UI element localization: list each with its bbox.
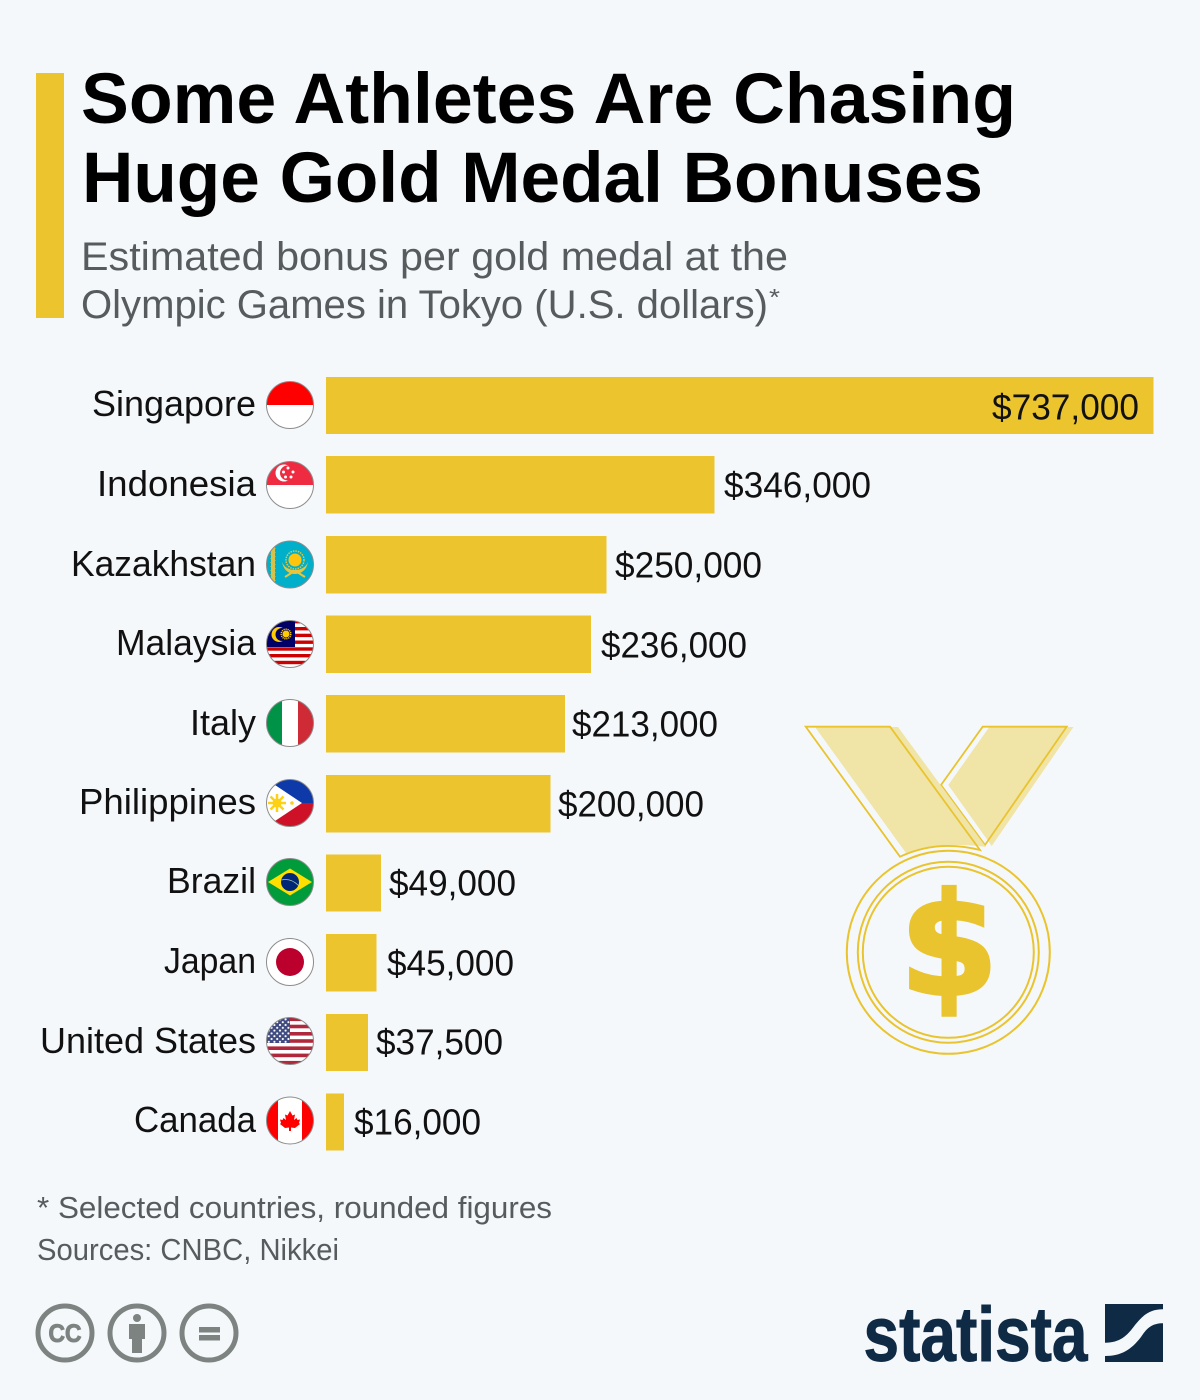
row: Brazil	[167, 854, 516, 912]
row: United States: $37,500	[376, 1022, 503, 1062]
icon: creative commons	[38, 1306, 92, 1360]
flag: red white maple leaf	[266, 1097, 314, 1145]
row: Malaysia	[116, 616, 747, 673]
flag: blue red white triangle	[266, 779, 314, 827]
subtitle: Olympic Games in Tokyo (U.S. dollars)	[81, 283, 768, 327]
subtitle: Estimated bonus per gold medal at the	[81, 235, 788, 279]
footnote: * Selected countries, rounded figures	[37, 1190, 552, 1225]
row: Kazakhstan: Kazakhstan	[71, 543, 256, 584]
row: Japan: Japan	[164, 940, 256, 981]
icon: gold medal with dollar sign	[806, 727, 1074, 1054]
title accent bar	[36, 73, 64, 318]
row: Canada	[134, 1094, 481, 1150]
flag: red over white	[266, 381, 314, 429]
row: Indonesia: Indonesia	[97, 463, 257, 504]
row: Philippines: Philippines	[79, 781, 256, 822]
icon: creative commons: CC	[48, 1320, 82, 1348]
row: Canada: $16,000	[354, 1102, 481, 1142]
medal ribbon	[806, 727, 1074, 857]
row: Japan	[164, 934, 514, 992]
row: Italy: Italy	[190, 702, 256, 743]
footnote	[37, 1190, 552, 1267]
row: Indonesia: $346,000	[724, 464, 871, 506]
medal rings	[847, 851, 1050, 1054]
row: Malaysia: $236,000	[601, 624, 747, 666]
flag: green diamond globe	[266, 858, 314, 906]
logo mark	[1105, 1304, 1163, 1362]
icon: attribution	[110, 1306, 164, 1360]
row: Philippines	[79, 775, 704, 832]
flag: stars and stripes	[266, 1017, 314, 1065]
wordmark: statista	[864, 1292, 1088, 1378]
row: United States	[40, 1014, 503, 1071]
flag: red and white with crescent	[266, 461, 314, 509]
title	[81, 60, 1016, 218]
row: Brazil: Brazil	[167, 860, 256, 901]
row: Malaysia: Malaysia	[116, 622, 257, 663]
subtitle	[81, 235, 788, 327]
row: Singapore	[92, 377, 1154, 434]
footnote: Sources: CNBC, Nikkei	[37, 1232, 339, 1267]
licence icons	[38, 1306, 236, 1360]
row: Italy	[190, 695, 718, 752]
title: Some Athletes Are Chasing	[81, 60, 1016, 139]
flag: turquoise with sun and ornament	[266, 541, 314, 589]
row: Italy: $213,000	[572, 704, 718, 744]
bar chart	[40, 377, 1154, 1150]
subtitle: *	[769, 284, 780, 310]
title: Huge Gold Medal Bonuses	[82, 139, 983, 218]
row: Indonesia	[97, 456, 871, 514]
flag: green white red	[266, 699, 314, 747]
row: Brazil: $49,000	[389, 862, 516, 904]
flag: stripes with canton	[266, 620, 314, 668]
flag: white with red disc	[266, 938, 314, 986]
row: Kazakhstan	[71, 536, 762, 594]
row: Kazakhstan: $250,000	[615, 544, 762, 586]
row: Japan: $45,000	[387, 942, 514, 984]
row: Singapore: $737,000	[992, 386, 1139, 428]
row: United States: United States	[40, 1020, 256, 1061]
row: Canada: Canada	[134, 1099, 257, 1140]
dollar sign: $	[900, 864, 998, 1028]
row: Philippines: $200,000	[558, 784, 704, 824]
icon: no derivatives	[182, 1306, 236, 1360]
statista logo	[864, 1292, 1163, 1378]
row: Singapore: Singapore	[92, 383, 256, 424]
